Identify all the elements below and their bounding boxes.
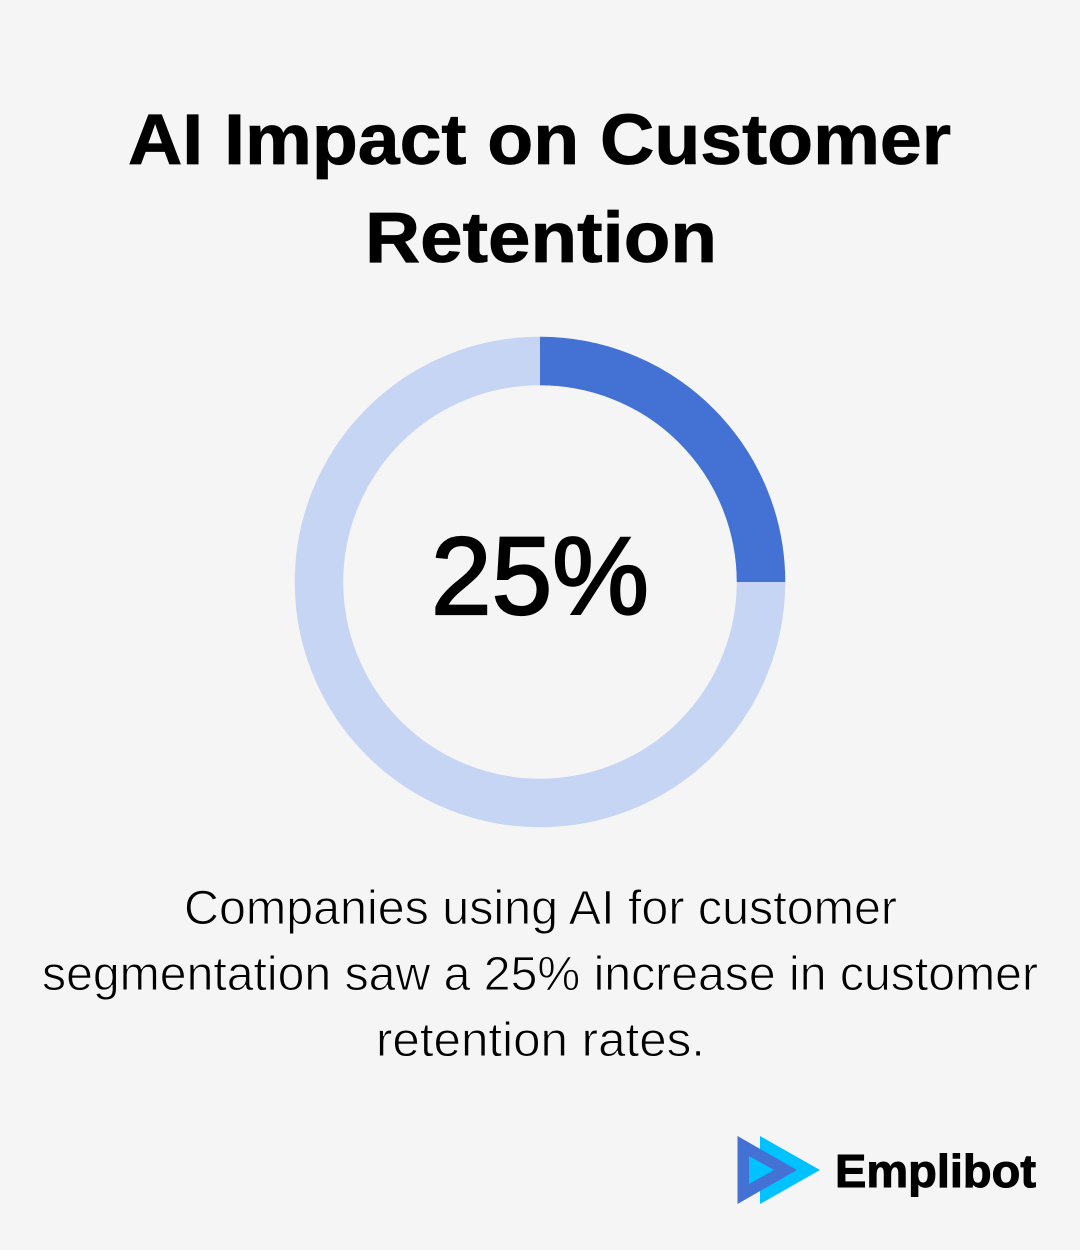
title: AI Impact on Customer xyxy=(128,101,951,180)
donut center value: 25% xyxy=(431,515,649,638)
logo: Emplibot xyxy=(738,1136,1036,1204)
donut chart: 25% xyxy=(319,361,761,803)
description text: retention rates. xyxy=(376,1014,705,1067)
donut track: remaining 75% xyxy=(319,361,761,803)
title: Retention xyxy=(365,199,717,278)
description text: Companies using AI for customer xyxy=(184,882,897,935)
donut segment: 25% xyxy=(540,361,761,582)
logo icon: double play triangles xyxy=(738,1136,820,1204)
description text xyxy=(42,882,1038,1067)
title xyxy=(128,101,951,278)
logo wordmark: Emplibot xyxy=(835,1145,1036,1197)
description text: segmentation saw a 25% increase in customer xyxy=(42,948,1038,1001)
